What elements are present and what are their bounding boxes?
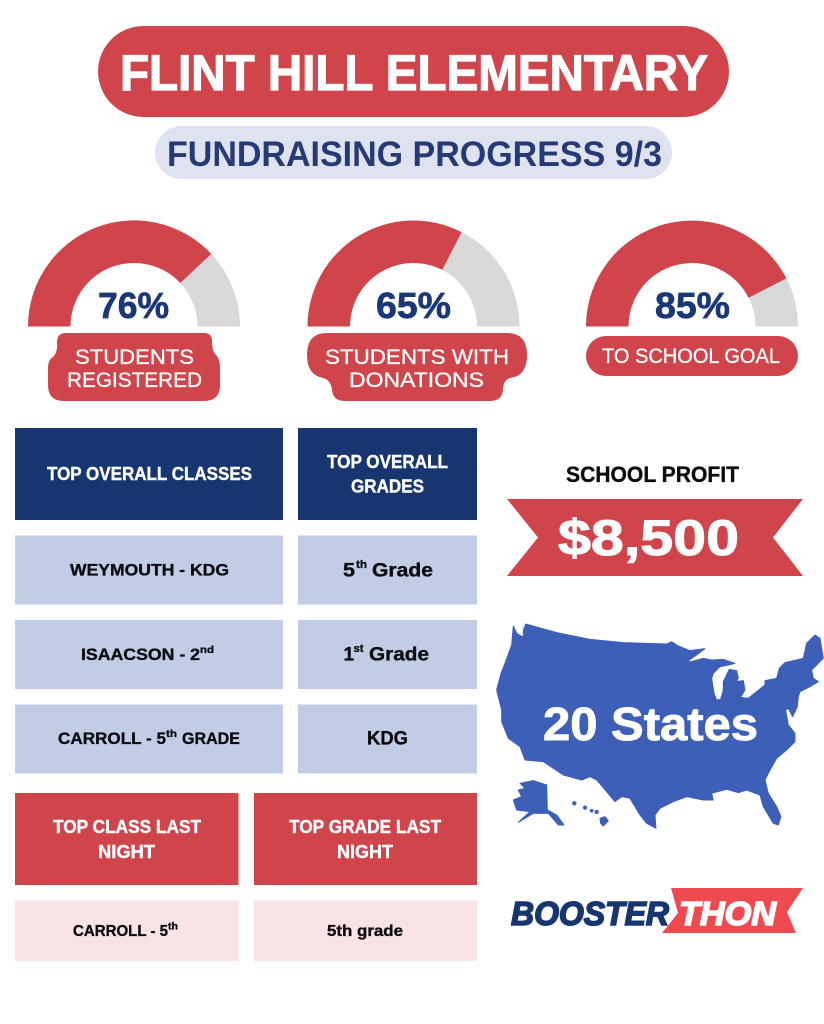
- gauge value: 65%: [376, 285, 451, 326]
- header: top overall classes: [15, 428, 283, 520]
- map: states reached: [497, 624, 823, 828]
- ribbon: profit amount: [507, 499, 803, 576]
- row: 1st grade: [298, 620, 477, 689]
- row: Carroll: [15, 704, 283, 774]
- row: 5th grade last night: [254, 900, 477, 961]
- row: Isaacson: nd: [200, 645, 214, 656]
- map label: 20 States: [543, 698, 758, 750]
- row: Carroll 5th: CARROLL - 5: [73, 923, 168, 940]
- row: Carroll 5th: [15, 900, 238, 961]
- row: 5th grade last night: 5th grade: [327, 923, 403, 940]
- gauge track: [28, 220, 240, 326]
- header: top overall grades: [298, 428, 477, 520]
- row: Weymouth: [15, 536, 283, 604]
- gauge label: DONATIONS: [349, 368, 484, 392]
- row: Isaacson: ISAACSON - 2: [81, 645, 200, 664]
- heading: school profit: SCHOOL PROFIT: [566, 462, 740, 487]
- panel: school goal gauge: [586, 220, 798, 376]
- gauge value: 76%: [98, 285, 169, 326]
- row: Carroll: GRADE: [182, 729, 240, 748]
- panel: top overall grades table: [298, 428, 477, 774]
- header: top grade last night: NIGHT: [337, 842, 393, 862]
- gauge label: TO SCHOOL GOAL: [602, 345, 780, 368]
- ribbon: profit amount: $8,500: [558, 510, 739, 566]
- panel: students with donations gauge: [307, 221, 527, 401]
- logo wordmark: booster: BOOSTER: [511, 895, 669, 932]
- gauge label: STUDENTS WITH: [325, 345, 509, 369]
- icon: USA silhouette: [497, 624, 823, 828]
- panel: top grade last night: [254, 793, 477, 961]
- gauge fill 76%: [28, 220, 211, 326]
- gauge label: [48, 333, 220, 401]
- gauge value: 85%: [655, 285, 730, 326]
- title: FLINT HILL ELEMENTARY: [120, 45, 708, 101]
- row: 1st grade: st: [354, 643, 364, 655]
- gauge fill 85%: [586, 221, 786, 326]
- logo wordmark: thon: THON: [679, 895, 777, 932]
- header: top class last night: NIGHT: [98, 842, 155, 862]
- gauge label: [586, 336, 798, 376]
- header: top class last night: [15, 793, 238, 885]
- row: Isaacson: [15, 620, 283, 689]
- row: Carroll 5th: th: [168, 922, 178, 932]
- row: 1st grade: 1: [344, 644, 354, 666]
- row: 5th grade: Grade: [372, 560, 433, 582]
- row: Carroll: CARROLL - 5: [58, 729, 166, 748]
- panel: top class last night: [15, 793, 238, 961]
- gauge label: STUDENTS: [75, 345, 194, 369]
- logo: Boosterthon: [511, 888, 803, 933]
- header: top grade last night: [254, 793, 477, 885]
- gauge track: [586, 220, 798, 326]
- row: Carroll: th: [166, 729, 177, 740]
- logo ribbon: [662, 888, 803, 933]
- gauge label: [307, 333, 527, 401]
- header: top grade last night: TOP GRADE LAST: [289, 817, 441, 837]
- row: 5th grade: [298, 536, 477, 604]
- gauge fill 65%: [308, 221, 462, 326]
- row: 5th grade: 5: [343, 560, 355, 582]
- row: KDG: KDG: [367, 728, 408, 750]
- header: top class last night: TOP CLASS LAST: [53, 817, 201, 837]
- header: top overall grades: GRADES: [351, 476, 424, 496]
- row: KDG: [298, 704, 477, 774]
- subtitle: FUNDRAISING PROGRESS 9/3: [167, 135, 662, 174]
- title: [98, 26, 729, 117]
- row: 1st grade: Grade: [369, 644, 429, 666]
- gauge label: REGISTERED: [67, 368, 202, 392]
- panel: students registered gauge: [28, 220, 240, 401]
- header: top overall grades: TOP OVERALL: [327, 452, 448, 472]
- row: Weymouth: WEYMOUTH - KDG: [70, 560, 229, 580]
- row: 5th grade: th: [356, 559, 367, 571]
- gauge track: [308, 221, 520, 326]
- header: top overall classes: TOP OVERALL CLASSES: [47, 464, 252, 484]
- panel: top overall classes table: [15, 428, 283, 774]
